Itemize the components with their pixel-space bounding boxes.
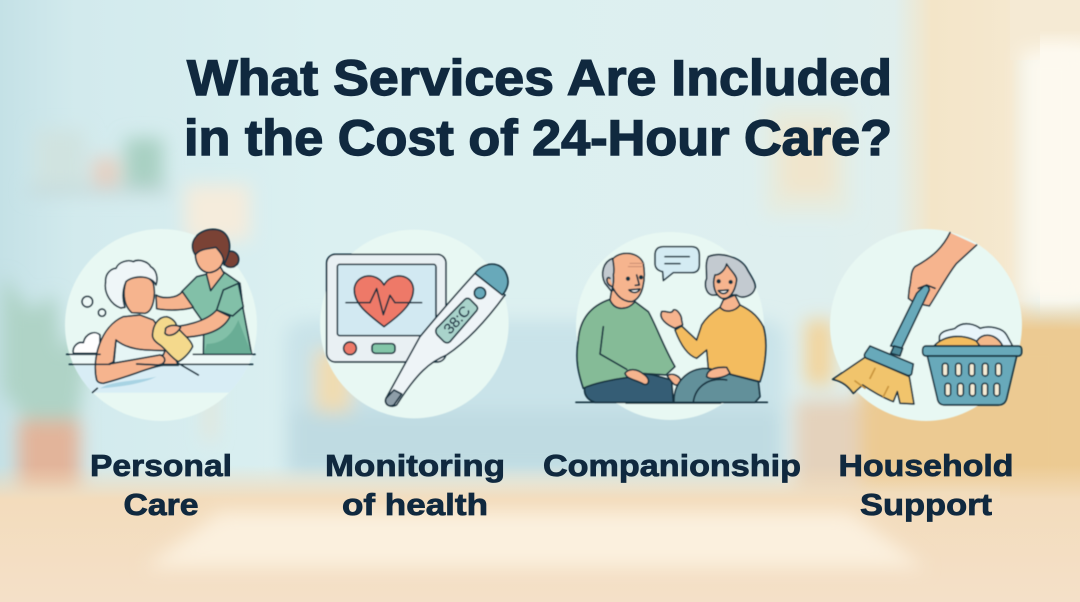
title: What Services Are Included xyxy=(187,50,892,106)
woman xyxy=(661,255,766,402)
label: Monitoring of health: of health xyxy=(342,487,488,522)
label: Monitoring of health xyxy=(325,448,505,522)
icon: broom and laundry basket xyxy=(830,229,1022,421)
circle backdrop xyxy=(65,229,257,421)
label: Household Support: Household xyxy=(838,448,1014,483)
water xyxy=(74,365,248,392)
man xyxy=(577,253,681,402)
label: Personal Care xyxy=(90,448,232,522)
title xyxy=(184,50,892,166)
icon: personal care bath scene xyxy=(63,229,260,421)
circle backdrop xyxy=(830,229,1022,421)
foam and bubbles xyxy=(73,296,106,353)
hand xyxy=(908,233,977,306)
caregiver xyxy=(156,229,252,354)
monitor xyxy=(327,254,446,362)
laundry basket xyxy=(923,324,1022,405)
icon: two seniors talking xyxy=(576,232,767,420)
bather xyxy=(95,260,178,388)
label: Personal Care: Care xyxy=(124,487,198,522)
speech bubble xyxy=(655,247,699,281)
title: in the Cost of 24-Hour Care? xyxy=(184,110,892,166)
thermometer: 38:C xyxy=(441,303,474,338)
label: Household Support xyxy=(838,448,1014,522)
thermometer xyxy=(385,264,508,406)
label: Companionship: Companionship xyxy=(543,448,801,483)
circle backdrop xyxy=(320,230,509,418)
circle backdrop xyxy=(576,232,764,420)
icon: heart monitor and thermometer xyxy=(320,230,509,418)
washcloth xyxy=(152,317,193,362)
label: Monitoring of health: Monitoring xyxy=(325,448,505,483)
label: Personal Care: Personal xyxy=(90,448,232,483)
broom xyxy=(833,286,929,404)
label: Household Support: Support xyxy=(860,487,992,522)
